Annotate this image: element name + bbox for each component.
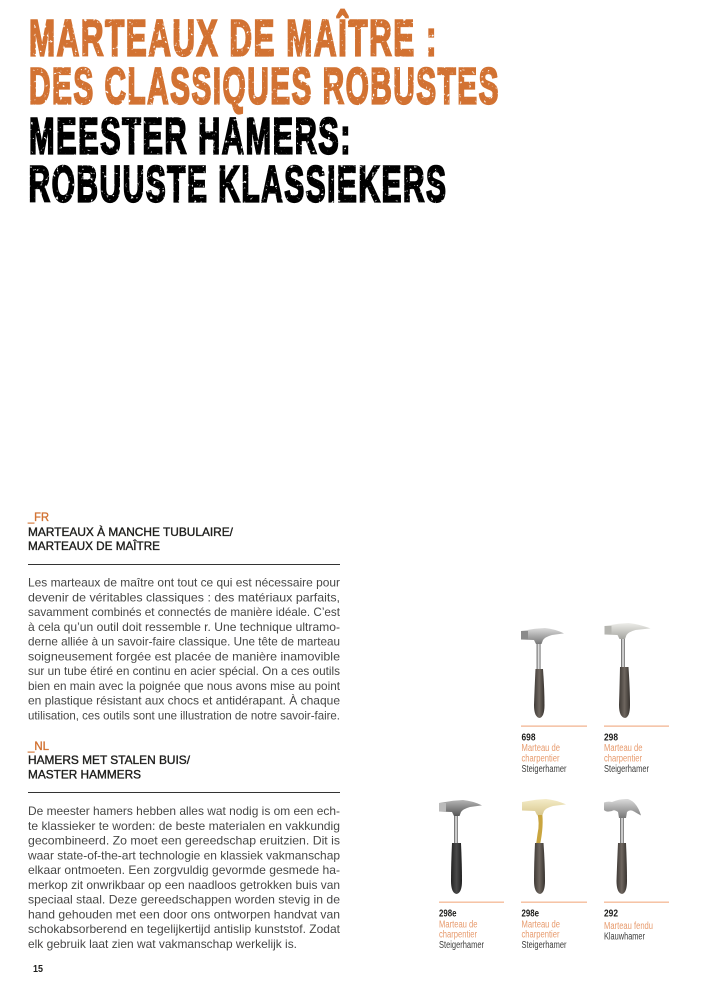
caption 292 <box>604 908 653 942</box>
caption 698: charpentier <box>522 754 560 764</box>
French body text <box>28 576 341 722</box>
title line: marteaux de maître: MARTEAUX DE MAÎTRE : <box>29 8 438 66</box>
French body text: soigneusement forgée est placée de manière inamovible <box>28 649 340 663</box>
Dutch heading: HAMERS MET STALEN BUIS/ <box>28 753 191 767</box>
caption 298e gold <box>522 908 567 951</box>
product: hammer 292 <box>604 799 669 942</box>
French body text: utilisation, ces outils sont une illustration de notre savoir-faire. <box>28 708 340 722</box>
caption 298e steel: Marteau de <box>439 920 478 930</box>
French body text: en plastique résistant aux chocs et antidérapant. À chaque <box>28 694 340 708</box>
caption 298e gold: charpentier <box>522 930 560 940</box>
icon: hammer 298e gold <box>522 799 566 894</box>
Dutch body text: speciaal staal. Deze gereedschappen worden stevig in de <box>28 892 340 906</box>
Dutch heading <box>28 753 191 782</box>
French body text: savamment combinés et connectés de manière idéale. C’est <box>28 605 341 619</box>
page number: 15 <box>33 963 43 975</box>
caption 298e steel: 298e <box>439 908 457 920</box>
French body text: Les marteaux de maître ont tout ce qui est nécessaire pour <box>28 576 340 590</box>
Dutch body text: elkaar ontmoeten. Een zorgvuldig gevormde gesmede ha- <box>28 863 340 877</box>
caption 698 <box>522 732 567 775</box>
title line: meester hamers: MEESTER HAMERS: <box>29 108 352 164</box>
caption 298: charpentier <box>604 754 643 764</box>
caption 698: 698 <box>522 732 536 744</box>
product: hammer 298e steel <box>439 800 504 951</box>
Dutch body text: hand gehouden met een door ons ontworpen handvat van <box>28 907 340 921</box>
icon: hammer 298 <box>604 623 650 718</box>
Dutch body text: gecombineerd. Zo moet een gereedschap eruitzien. Dit is <box>28 834 340 848</box>
product: hammer 298 <box>604 623 669 775</box>
panel: French text <box>27 510 341 722</box>
panel: Dutch text <box>27 739 341 951</box>
product: hammer 298e gold <box>521 799 587 951</box>
caption 292: Marteau fendu <box>604 921 653 932</box>
French body text: à cela qu’un outil doit ressemble r. Une technique ultramo- <box>28 620 340 634</box>
Dutch body text: merkop zit onwrikbaar op een naadloos getrokken buis van <box>28 878 340 892</box>
French body text: derne alliée à un savoir-faire classique. Une tête de marteau <box>28 634 340 648</box>
caption 292: 292 <box>604 908 618 920</box>
Dutch heading: MASTER HAMMERS <box>28 768 141 782</box>
French body text: bien en main avec la poignée que nous avons mise au point <box>28 679 341 693</box>
product: hammer 698 <box>521 628 587 775</box>
caption 292: Klauwhamer <box>604 932 645 942</box>
French heading <box>28 525 234 553</box>
Dutch body text: schokabsorberend en tegelijkertijd antislip kunststof. Zodat <box>28 922 341 936</box>
caption 298e gold: Steigerhamer <box>522 940 567 951</box>
caption 298e steel <box>439 908 485 951</box>
French body text: sur un tube étiré en continu en acier spécial. On a ces outils <box>28 664 340 678</box>
Dutch body text: waar state-of-the-art technologie en klassiek vakmanschap <box>27 848 340 862</box>
Dutch body text: De meester hamers hebben alles wat nodig is om een ech- <box>28 804 340 818</box>
caption 298: Steigerhamer <box>604 764 650 775</box>
Dutch body text: elk gebruik laat zien wat vakmanschap werkelijk is. <box>28 937 297 951</box>
icon: hammer 292 <box>604 799 641 894</box>
caption 298e gold: Marteau de <box>522 920 560 930</box>
language tag NL: _NL <box>27 739 49 753</box>
caption 298e gold: 298e <box>522 908 539 920</box>
caption 298e steel: charpentier <box>439 930 478 940</box>
Dutch body text: te klassieker te worden: de beste materialen en vakkundig <box>28 819 340 833</box>
French body text: devenir de véritables classiques : des matériaux parfaits, <box>28 590 340 604</box>
caption 698: Steigerhamer <box>522 764 567 775</box>
French heading: MARTEAUX À MANCHE TUBULAIRE/ <box>28 525 234 539</box>
icon: hammer 298e steel <box>439 800 482 894</box>
caption 298: 298 <box>604 732 618 744</box>
caption 298: Marteau de <box>604 743 643 754</box>
icon: hammer 698 <box>521 628 564 718</box>
Dutch body text <box>27 804 341 951</box>
language tag FR: _FR <box>27 510 49 524</box>
title <box>28 8 500 212</box>
French heading: MARTEAUX DE MAÎTRE <box>28 539 160 553</box>
caption 298e steel: Steigerhamer <box>439 940 485 951</box>
caption 298 <box>604 732 650 775</box>
caption 698: Marteau de <box>522 743 560 754</box>
